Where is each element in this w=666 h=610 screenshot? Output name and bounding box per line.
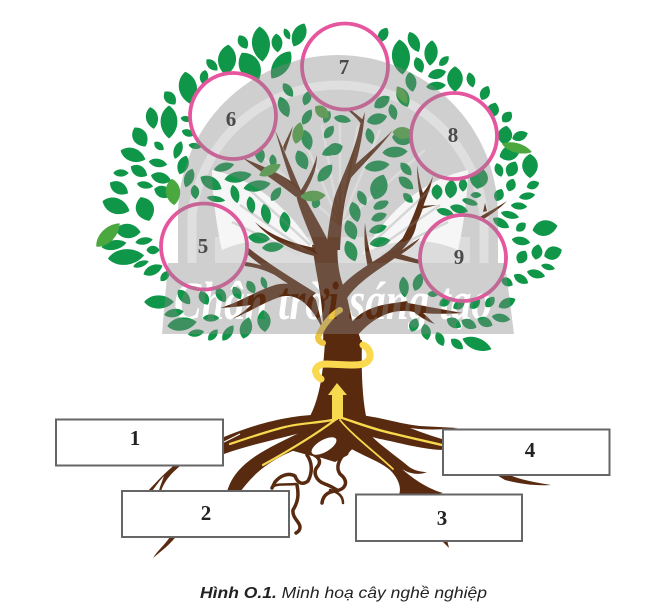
box 3: 3 (437, 506, 447, 530)
caption: Hình O.1. Minh hoạ cây nghề nghiệp (200, 585, 487, 602)
circle numbers: 5 (198, 234, 208, 258)
circle numbers: 6 (226, 107, 236, 131)
circle numbers (198, 55, 464, 269)
circle 9 (420, 215, 506, 301)
circle numbers: 8 (448, 123, 458, 147)
circle numbers: 9 (454, 245, 464, 269)
circle 5 (161, 204, 247, 290)
trunk and branches (220, 110, 507, 425)
roots (148, 415, 551, 558)
circle 7 (302, 24, 388, 110)
box 2: 2 (201, 501, 211, 525)
foliage: dark green leaves (100, 21, 564, 355)
circle numbers: 7 (339, 55, 349, 79)
box 4: 4 (525, 438, 536, 462)
box 3 (356, 494, 522, 541)
box 2 (122, 491, 289, 537)
circle 8 (411, 93, 497, 179)
box 1 (56, 420, 223, 466)
box 4 (443, 430, 610, 475)
box 1: 1 (130, 426, 140, 450)
watermark overlay (162, 55, 514, 334)
circle 6 (190, 73, 276, 159)
tree illustration (96, 22, 562, 558)
foliage: light green leaves over branches (92, 84, 533, 251)
yellow path lines, coil and arrow (230, 310, 442, 469)
